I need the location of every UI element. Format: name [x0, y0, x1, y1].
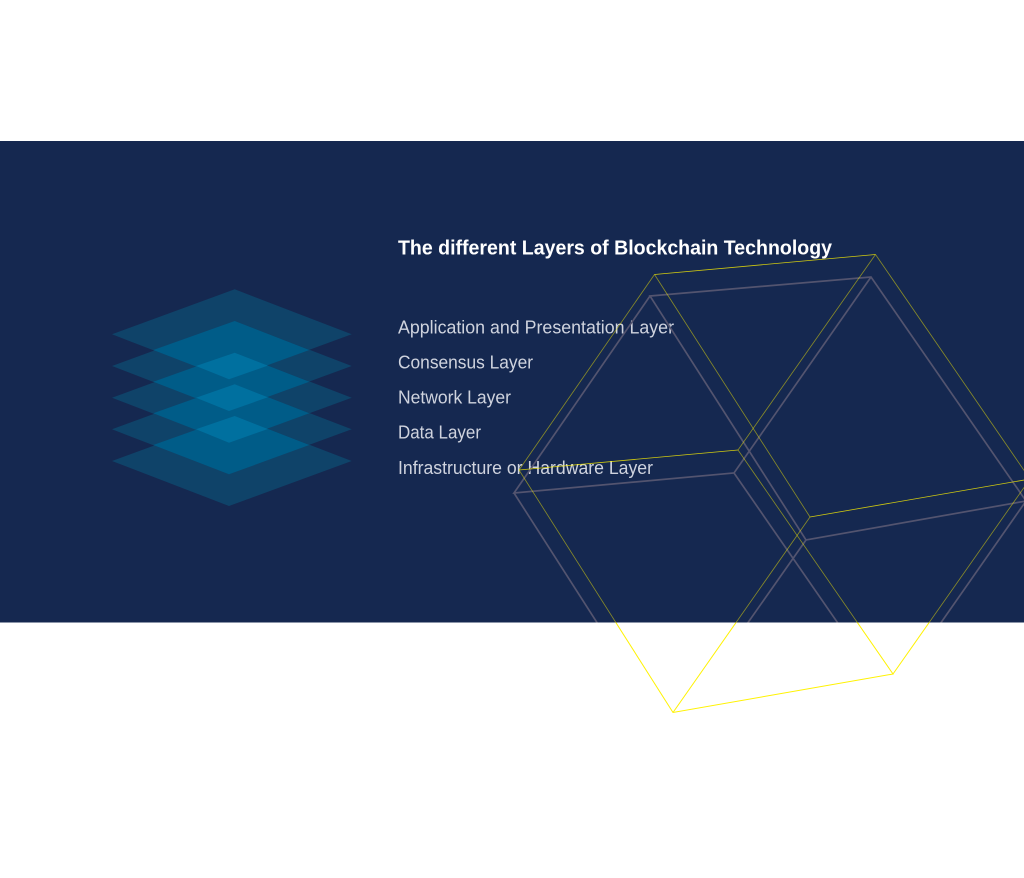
layer item: data: Data Layer [398, 423, 481, 443]
title: The different Layers of Blockchain Technology [398, 238, 833, 260]
grey wireframe cube [512, 276, 1024, 622]
list of blockchain layers [398, 318, 674, 478]
layer item: network: Network Layer [398, 388, 511, 408]
layer item: infrastructure: Infrastructure or Hardware Layer [398, 458, 653, 478]
layer item: consensus: Consensus Layer [398, 352, 533, 372]
yellow wireframe cube [519, 254, 1024, 712]
navy background band [0, 141, 1024, 622]
icon: stacked blockchain layers [112, 289, 352, 506]
layer item: application: Application and Presentation Layer [398, 318, 674, 338]
